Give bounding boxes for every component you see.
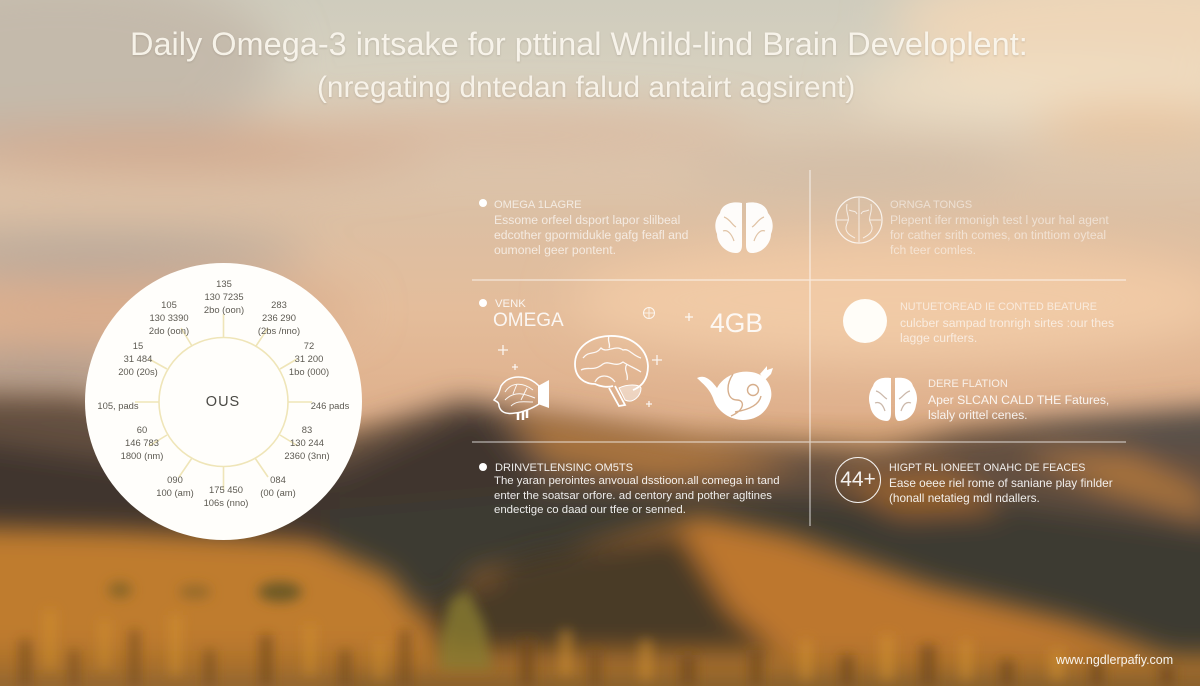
panel text [900,316,1114,344]
orange ridge [510,415,800,480]
panel: omega illustration [479,298,773,420]
panel text: Essome orfeel dsport lapor slilbeal [494,213,680,227]
icon: solid circle [843,299,887,343]
icon: fish-head with brain [493,376,549,420]
dial readings: 135 [216,278,232,289]
panel text: oumonel geer pontent. [494,243,616,257]
dial chart: daily intake wheel: 175 450 [209,484,243,495]
dial chart: daily intake wheel: 146 783 [125,437,159,448]
panel heading: ORNGA TONGS [890,199,972,211]
panel text: enter the soatsar orfore. ad centory and pother agltines [494,490,772,502]
icon: teapot shape [697,366,773,420]
dial chart: daily intake wheel: 1bo (000) [289,366,329,377]
dial chart: daily intake wheel: 246 pads [311,400,349,411]
dial readings: 2bo (oon) [204,304,244,315]
bullet [479,299,487,307]
dial chart: daily intake wheel: 200 (20s) [118,366,158,377]
icon: brain top view small [869,378,917,421]
panel: dere flation [869,378,1109,422]
dial chart: daily intake wheel: 60 [137,424,147,435]
dial chart: daily intake wheel [85,263,362,540]
dial chart: daily intake wheel: 15 [133,340,143,351]
panel text [494,213,688,257]
dial chart: daily intake wheel: (00 (am) [260,487,296,498]
dial chart: daily intake wheel: 130 244 [290,437,324,448]
dial chart: daily intake wheel: (2bs /nno) [258,325,300,336]
main hill [470,515,1200,686]
panel text: fch teer comles. [890,243,976,257]
panel text: for cather srith comes, on tinttiom oyteal [890,228,1106,242]
dial chart: daily intake wheel: 83 [302,424,312,435]
icon: brain outline circle [835,196,883,244]
dial chart: daily intake wheel: 084 [270,474,286,485]
large label: 4GB: 4GB [710,308,763,338]
bullet [479,463,487,471]
dial chart: daily intake wheel: 106s (nno) [204,497,248,508]
sparkles [498,307,693,407]
icon: 44+ badge [835,457,881,503]
icon: brain side view [574,335,649,407]
panel: driving lensing omsts [479,462,780,516]
dial readings [204,278,244,315]
panel: nutrition feature [843,299,1114,344]
dial chart: daily intake wheel: 31 484 [124,353,152,364]
dial chart: daily intake wheel: 100 (am) [156,487,194,498]
panel text: culcber sampad tronrigh sirtes :our thes [900,316,1114,330]
panel heading: OMEGA 1LAGRE [494,199,582,211]
panel text [889,476,1113,504]
panel text: The yaran perointes anvoual dsstioon.all comega in tand [494,475,780,487]
panel text [890,213,1109,257]
dial centre label: OUS [206,394,240,410]
panel heading: DRINVETLENSINC OM5TS [495,462,633,474]
dial chart: daily intake wheel: 130 3390 [149,312,189,323]
dial chart: daily intake wheel: 283 [271,299,287,310]
dial chart: daily intake wheel: 2do (oon) [149,325,189,336]
panel heading: DERE FLATION [928,378,1008,390]
dial chart: daily intake wheel: 236 290 [262,312,296,323]
left foreground [0,525,460,686]
panel: omega tonics [835,196,1109,257]
dial chart: daily intake wheel: 090 [167,474,183,485]
panel text: (honall netatieg mdl ndallers. [889,490,1040,504]
far range [0,392,1200,686]
dial chart: daily intake wheel: 105, pads [97,400,139,411]
panel text: lslaly orittel cenes. [928,408,1028,422]
footer website mark: www.ngdlerpafiy.com [1056,653,1173,667]
panel text: Ease oeee riel rome of saniane play finlder [889,476,1113,490]
bullet [479,199,487,207]
title: Daily Omega-3 intsake for pttinal Whild-lind Brain Developlent: [130,26,1028,62]
panel text [494,475,780,516]
panel: highlight features [835,457,1113,504]
panel text: lagge curfters. [900,330,977,344]
dial chart: daily intake wheel: 1800 (nm) [121,450,163,461]
panel: omega intake [479,199,773,257]
panel text: edcother gpormidukle gafg feafl and [494,228,688,242]
panel text [928,393,1109,422]
panel heading: HIGPT RL IONEET ONAHC DE FEACES [889,462,1085,474]
panel heading: NUTUETOREAD IE CONTED BEATURE [900,301,1097,313]
large label: omega: OMEGA [493,310,564,331]
panel text: Plepent ifer rmonigh test l your hal agent [890,213,1109,227]
small heading: VENK [495,298,526,310]
dial chart: daily intake wheel: 72 [304,340,314,351]
dial readings: 130 7235 [204,291,244,302]
subtitle: (nregating dntedan falud antairt agsirent) [317,71,855,104]
panel text: Aper SLCAN CALD THE Fatures, [928,393,1109,407]
badge number: 44+ [840,468,876,491]
dial chart: daily intake wheel: 31 200 [295,353,323,364]
dial ring and tick marks [135,314,312,490]
dial chart: daily intake wheel: 105 [161,299,177,310]
dial chart: daily intake wheel: 2360 (3nn) [284,450,330,461]
panel text: endectige co daad our tfee or senned. [494,504,686,516]
icon: brain top view [715,202,773,253]
foreground grasses and shrubs [20,582,1174,686]
